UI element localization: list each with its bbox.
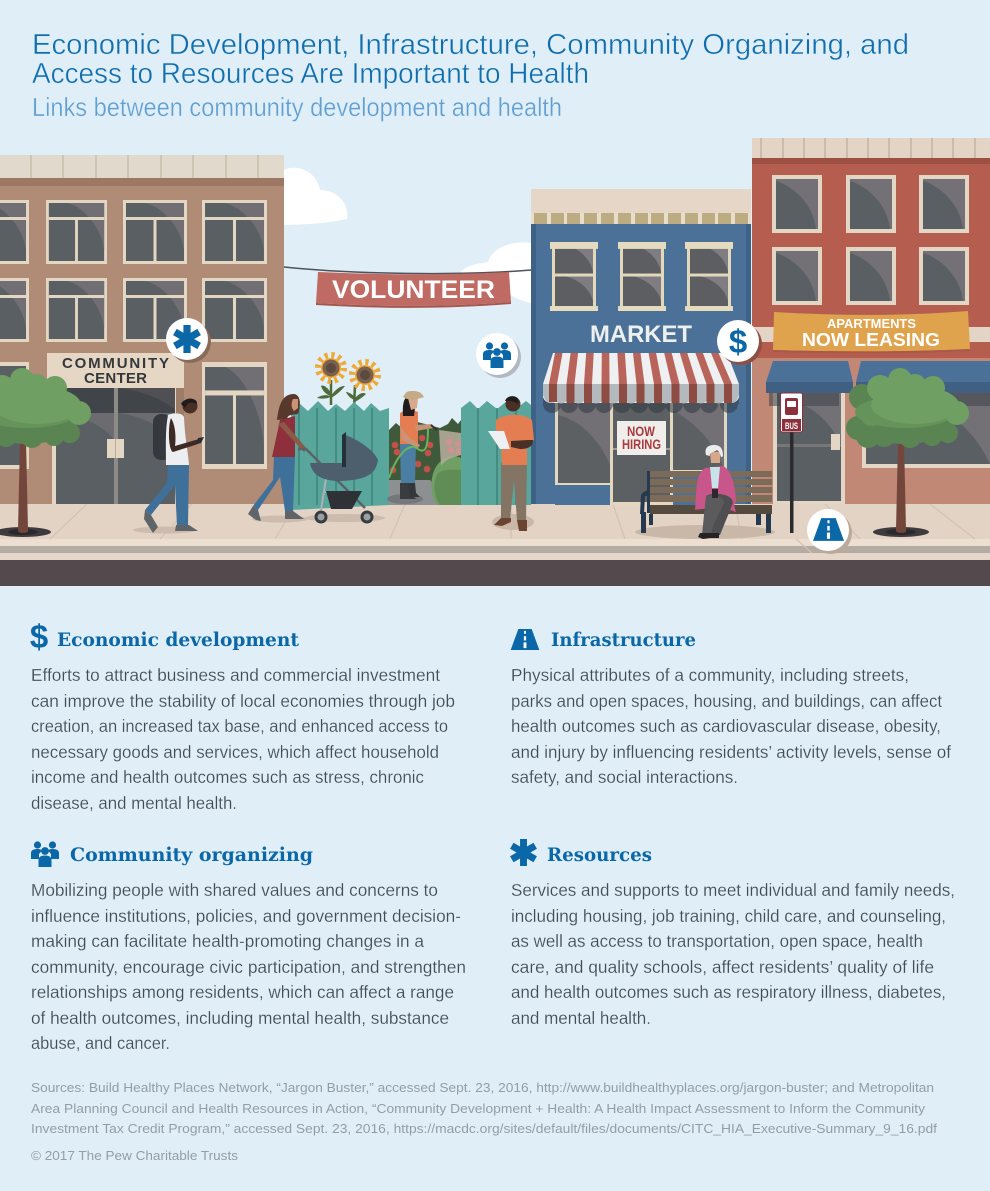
apartment door and window — [769, 393, 990, 504]
fence: left section — [291, 401, 389, 510]
now leasing banner — [773, 311, 970, 353]
community center sign: COMMUNITY — [62, 355, 169, 372]
text: community organizing — [31, 880, 466, 1053]
now leasing banner: APARTMENTS — [827, 317, 916, 331]
now hiring sign: HIRING — [622, 436, 661, 452]
market sign text: MARKET — [590, 321, 692, 348]
garden — [389, 418, 462, 505]
overhead wire — [284, 267, 531, 274]
heading: infrastructure: Infrastructure — [551, 629, 696, 651]
volunteer banner — [316, 272, 511, 308]
person: man with clipboard — [488, 396, 534, 531]
text: resources: and mental health. — [511, 1008, 651, 1028]
heading: economic development: Economic development — [57, 629, 299, 651]
fence: right section — [461, 401, 531, 505]
text: community organizing: community, encourage civic participation, and strengthen — [31, 957, 466, 977]
text: community organizing: abuse, and cancer. — [31, 1033, 170, 1053]
text: resources: as well as access to transportation, open space, health — [511, 931, 923, 951]
title — [32, 29, 909, 90]
text: resources: care, and quality schools, affect residents’ quality of life — [511, 957, 934, 977]
volunteer banner: VOLUNTEER — [332, 276, 495, 304]
now hiring sign — [617, 421, 666, 455]
street scene illustration — [0, 138, 990, 586]
text: community organizing: influence institutions, policies, and government decision- — [31, 906, 461, 926]
now hiring sign: NOW — [627, 423, 656, 439]
icon: community organizing badge — [476, 333, 521, 378]
sources: Sources: Build Healthy Places Network, “Jargon Buster,” accessed Sept. 23, 2016, http://www.buildhealthyplaces.org/jargon-buster; and Metropolitan — [31, 1081, 934, 1095]
text: community organizing: making can facilitate health-promoting changes in a — [31, 931, 424, 951]
text: resources: Services and supports to meet individual and family needs, — [511, 880, 955, 900]
icon: economic development badge: $ — [729, 323, 747, 360]
awning shadow — [543, 395, 739, 413]
shop windows and door — [555, 400, 727, 505]
subtitle: Links between community development and health — [32, 92, 562, 122]
text: community organizing: relationships among residents, which can affect a range — [31, 982, 454, 1002]
text: economic development: Efforts to attract business and commercial investment — [31, 665, 440, 685]
sources: Area Planning Council and Health Resources in Action, “Community Development + Health: A Health Impact Assessment to Inform the Community — [31, 1102, 926, 1116]
title: Access to Resources Are Important to Health — [32, 58, 589, 90]
text: resources: and health outcomes such as respiratory illness, diabetes, — [511, 982, 946, 1002]
icon: resources badge — [166, 318, 211, 363]
now leasing banner: NOW LEASING — [802, 329, 940, 350]
person: woman with stroller — [248, 394, 308, 522]
bus stop sign — [780, 393, 802, 533]
stroller — [298, 432, 385, 524]
heading: community organizing: Community organizing — [70, 844, 313, 866]
text: infrastructure: safety, and social interactions. — [511, 767, 738, 787]
text: infrastructure: Physical attributes of a community, including streets, — [511, 665, 909, 685]
text: resources — [511, 880, 955, 1028]
text: infrastructure: health outcomes such as cardiovascular disease, obesity, — [511, 716, 941, 736]
panel: community organizing — [31, 841, 466, 1053]
icon: road — [511, 629, 539, 650]
icon: infrastructure badge — [807, 509, 852, 554]
text: economic development: can improve the stability of local economies through job — [31, 691, 455, 711]
text: economic development: creation, an increased tax base, and enhanced access to — [31, 716, 448, 736]
building: community center — [0, 155, 284, 504]
text: economic development: income and health outcomes such as stress, chronic — [31, 767, 424, 787]
community center sign: CENTER — [84, 370, 147, 387]
title: Economic Development, Infrastructure, Community Organizing, and — [32, 29, 909, 61]
bench — [635, 471, 775, 539]
building: apartments — [752, 138, 990, 504]
text: community organizing: Mobilizing people with shared values and concerns to — [31, 880, 438, 900]
tree: right — [846, 368, 969, 537]
text: economic development — [31, 665, 455, 813]
sunflowers — [317, 355, 378, 408]
text: economic development: disease, and mental health. — [31, 793, 237, 813]
panel: infrastructure — [511, 629, 951, 787]
sources — [31, 1081, 938, 1136]
community center door — [52, 388, 184, 504]
icon: dollar sign: $ — [30, 618, 48, 655]
clouds — [284, 168, 531, 303]
text: infrastructure: and injury by influencing residents’ activity levels, sense of — [511, 742, 951, 762]
heading: resources: Resources — [547, 844, 652, 866]
community center sign — [47, 353, 184, 388]
text: economic development: necessary goods and services, which affect household — [31, 742, 439, 762]
text: community organizing: of health outcomes, including mental health, substance — [31, 1008, 449, 1028]
copyright: © 2017 The Pew Charitable Trusts — [31, 1149, 238, 1163]
person: woman on bench — [695, 445, 736, 539]
text: infrastructure — [511, 665, 951, 787]
person: man with backpack — [133, 398, 204, 534]
icon: asterisk — [510, 839, 537, 866]
icon: economic development badge — [717, 320, 762, 365]
blue awnings — [766, 361, 990, 393]
panel: resources — [510, 839, 955, 1028]
striped awning — [543, 353, 739, 404]
sources: Investment Tax Credit Program,” accessed Sept. 23, 2016, https://macdc.org/sites/default/files/documents/CITC_HIA_Executive-Summary_9_16.pdf — [31, 1122, 938, 1136]
sidewalk and street — [0, 504, 990, 586]
person: woman watering garden — [387, 391, 437, 504]
text: resources: including housing, job training, child care, and counseling, — [511, 906, 946, 926]
panel: economic development — [30, 618, 455, 813]
icon: people — [31, 841, 59, 867]
tree: left — [0, 368, 91, 537]
bus stop sign: BUS — [785, 421, 798, 431]
building: market — [531, 189, 751, 505]
text: infrastructure: parks and open spaces, housing, and buildings, can affect — [511, 691, 942, 711]
